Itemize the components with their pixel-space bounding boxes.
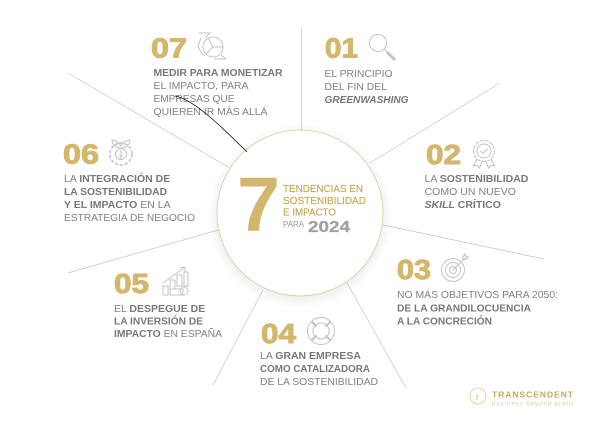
- text: trend 02: COMO UN NUEVO: [424, 186, 516, 198]
- text: trend 01: EL PRINCIPIO: [324, 68, 392, 80]
- icon: lifebuoy: [308, 318, 334, 344]
- center title: E IMPACTO: [283, 208, 336, 218]
- number 02: 02: [426, 139, 461, 170]
- panel: trend 07: [151, 32, 283, 118]
- icon: target: [442, 254, 468, 282]
- center title: 2024: [308, 219, 350, 236]
- text: trend 06: ESTRATEGIA DE NEGOCIO: [64, 212, 195, 224]
- text: trend 04: [260, 350, 378, 388]
- number 06: 06: [63, 138, 99, 170]
- number 04: 04: [261, 318, 296, 349]
- icon: growth chart: [163, 268, 188, 295]
- stray pen stroke: [175, 96, 247, 152]
- text: trend 07: MEDIR PARA MONETIZAR: [154, 67, 283, 79]
- text: trend 07: EMPRESAS QUE: [154, 93, 234, 105]
- text: trend 05: [114, 303, 222, 340]
- text: trend 07: EL IMPACTO, PARA: [154, 80, 248, 92]
- text: trend 03: [397, 288, 558, 328]
- text: trend 03: DE LA GRANDILOCUENCIA: [397, 302, 531, 314]
- number 07: 07: [151, 32, 187, 64]
- panel: trend 01: [324, 32, 408, 106]
- text: trend 02: [424, 173, 529, 211]
- text: trend 02: SKILL CRÍTICO: [424, 198, 501, 211]
- panel: trend 06: [63, 138, 195, 224]
- center title: PARA: [283, 220, 305, 229]
- text: trend 06: LA INTEGRACIÓN DE: [64, 172, 170, 185]
- center title: [283, 184, 366, 236]
- text: trend 07: QUIEREN IR MÁS ALLÁ: [154, 105, 268, 118]
- logo: Transcendent: r: [476, 392, 479, 402]
- panel: trend 02: [424, 139, 529, 211]
- text: trend 06: Y EL IMPACTO EN LA: [64, 199, 171, 211]
- panel: trend 03: [397, 254, 558, 328]
- logo: Transcendent: business beyond profit: [492, 402, 573, 408]
- text: trend 05: IMPACTO EN ESPAÑA: [114, 327, 222, 340]
- text: trend 04: LA GRAN EMPRESA: [260, 350, 361, 362]
- center title: TENDENCIAS EN: [283, 184, 363, 195]
- text: trend 06: [64, 172, 195, 224]
- icon: magnifier: [370, 34, 395, 60]
- text: trend 07: [154, 67, 283, 118]
- number 03: 03: [397, 254, 431, 285]
- text: trend 02: LA SOSTENIBILIDAD: [424, 173, 529, 185]
- icon: gear with leaves: [110, 140, 132, 165]
- logo: Transcendent: TRANSCENDENT: [492, 390, 574, 400]
- panel: trend 05: [114, 268, 222, 340]
- panel: trend 04: [260, 318, 378, 388]
- center title: SOSTENIBILIDAD: [283, 196, 366, 207]
- text: trend 05: EL DESPEGUE DE: [114, 303, 205, 315]
- text: trend 04: DE LA SOSTENIBILIDAD: [260, 376, 378, 388]
- icon: rosette: [474, 140, 494, 168]
- number 05: 05: [114, 268, 149, 299]
- text: trend 03: NO MÁS OBJETIVOS PARA 2050:: [397, 288, 558, 301]
- big number 7: 7: [237, 162, 280, 248]
- text: trend 04: COMO CATALIZADORA: [260, 363, 370, 375]
- number 01: 01: [325, 32, 358, 64]
- text: trend 01: DEL FIN DEL: [324, 81, 387, 93]
- text: trend 01: [324, 68, 408, 106]
- logo: Transcendent: [470, 388, 574, 408]
- central circle: [208, 124, 392, 308]
- text: trend 01: GREENWASHING: [324, 94, 408, 106]
- text: trend 06: LA SOSTENIBILIDAD: [64, 186, 167, 198]
- icon: cycle with pie: [198, 33, 226, 59]
- text: trend 05: LA INVERSIÓN DE: [114, 314, 203, 328]
- text: trend 03: A LA CONCRECIÓN: [397, 314, 492, 328]
